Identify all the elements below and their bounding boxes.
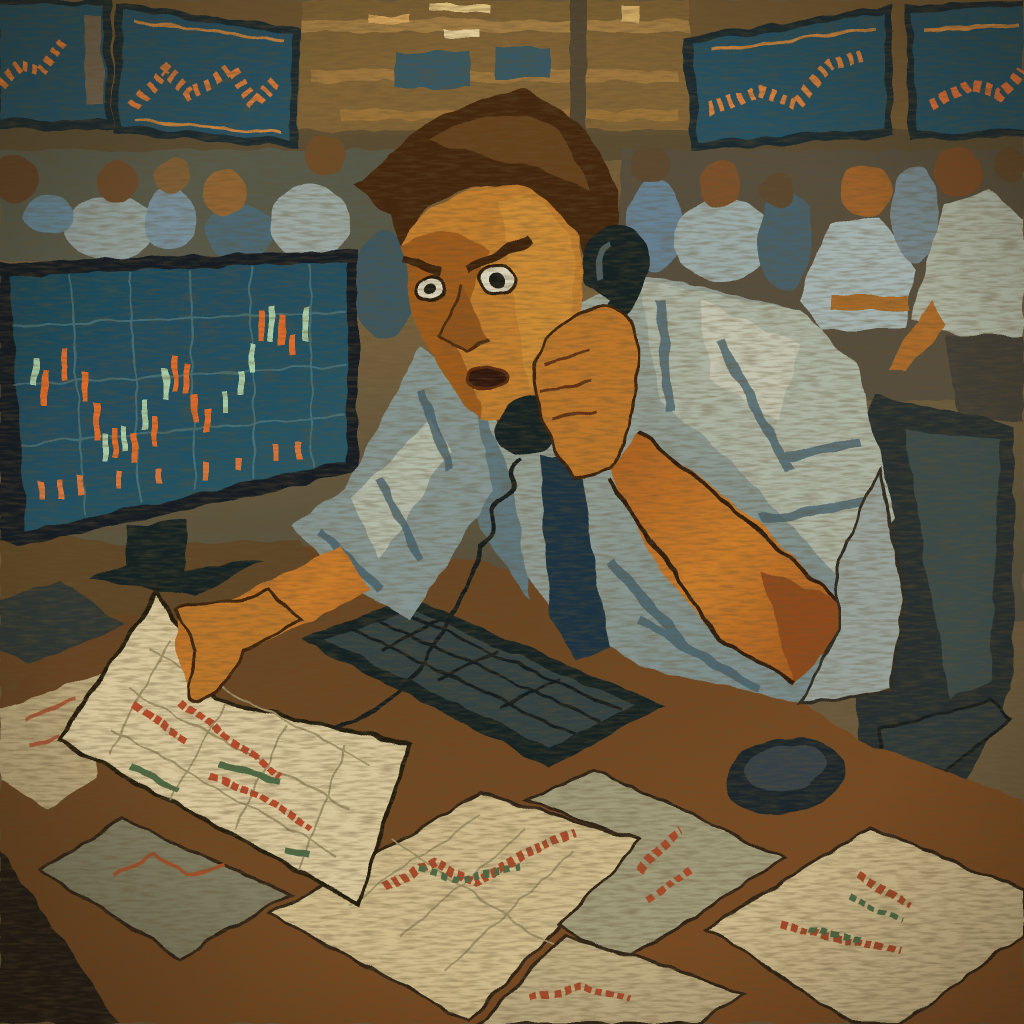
trader bbox=[175, 90, 905, 728]
paper: bottom bbox=[478, 935, 745, 1024]
shirt folds bbox=[610, 300, 880, 690]
forearm: phone arm bbox=[610, 430, 838, 682]
monitor: main left bbox=[0, 250, 358, 596]
hair bbox=[352, 90, 620, 260]
background: trading floor bbox=[0, 0, 1024, 620]
necktie bbox=[540, 455, 610, 660]
shirt: torso bbox=[430, 275, 905, 705]
chart grid bbox=[12, 265, 346, 515]
keyboard bbox=[300, 597, 665, 768]
paper: far left bbox=[0, 672, 105, 808]
paper: lower left bbox=[40, 818, 290, 958]
hand on phone bbox=[534, 306, 638, 480]
desk device left bbox=[0, 580, 125, 665]
monitors: top right bbox=[682, 0, 1024, 152]
shirt: left sleeve bbox=[292, 345, 495, 620]
paper: centre bbox=[270, 793, 645, 1020]
face bbox=[402, 184, 582, 421]
candlesticks bbox=[35, 305, 306, 500]
paper: far right bbox=[708, 828, 1024, 1024]
forearm: reaching bbox=[175, 545, 370, 700]
phone cord bbox=[335, 460, 520, 728]
hand on paper bbox=[175, 590, 300, 701]
chair bbox=[840, 395, 1015, 795]
monitor: top left bbox=[0, 0, 300, 148]
desk bbox=[0, 545, 1024, 1024]
eyes and brows bbox=[402, 240, 530, 300]
mouth bbox=[468, 367, 508, 389]
nose bbox=[440, 285, 488, 352]
crowd: left traders bbox=[0, 134, 417, 340]
phone bbox=[335, 225, 649, 728]
rolled sleeve cuff bbox=[800, 470, 905, 705]
mouse bbox=[718, 728, 850, 824]
paper: right middle bbox=[525, 770, 785, 962]
crowd: right traders bbox=[620, 146, 1024, 420]
neck bbox=[480, 340, 600, 440]
papers on desk bbox=[0, 590, 1024, 1024]
paper: held sheet bbox=[60, 590, 410, 903]
